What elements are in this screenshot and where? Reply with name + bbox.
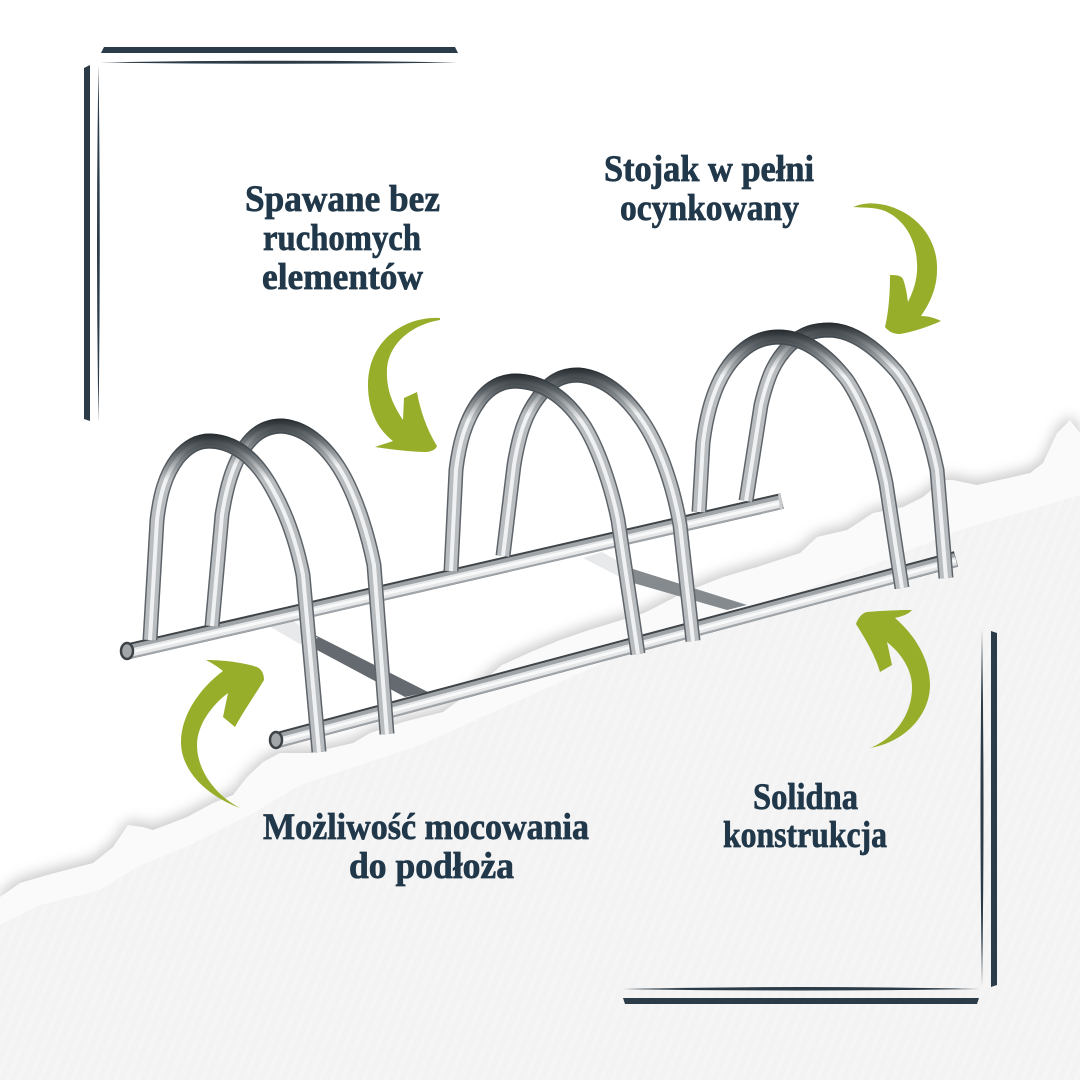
label: solid construction: Solidna <box>753 777 858 818</box>
product: bike rack <box>121 330 956 752</box>
label: welded without moving parts <box>245 179 440 298</box>
label: solid construction: konstrukcja <box>723 815 887 856</box>
corner frame: top left <box>84 47 458 422</box>
label: welded without moving parts: elementów <box>262 257 423 298</box>
hoop: right front <box>699 337 902 588</box>
corner frame: bottom right <box>623 630 997 1004</box>
hoop: left rear <box>212 426 387 734</box>
arrow: galvanised label to rack <box>853 203 941 334</box>
arrow: welded label to rack <box>368 318 440 452</box>
crossbar: right <box>583 552 747 610</box>
label: ground mounting: Możliwość mocowania <box>263 807 589 848</box>
arrow: mounting label to rack <box>181 660 264 808</box>
hoop: right rear <box>746 330 946 578</box>
label: solid construction <box>723 777 887 856</box>
label: fully galvanised: ocynkowany <box>620 188 799 229</box>
label: welded without moving parts: ruchomych <box>263 218 421 259</box>
label: welded without moving parts: Spawane bez <box>245 179 440 220</box>
label: ground mounting <box>263 807 589 887</box>
torn paper background <box>0 416 1080 1080</box>
hoop: middle front <box>451 381 638 654</box>
crossbar: left <box>267 621 428 697</box>
label: fully galvanised: Stojak w pełni <box>604 149 814 190</box>
arrow: construction label to rack <box>856 610 930 748</box>
label: fully galvanised <box>604 149 814 229</box>
label: ground mounting: do podłoża <box>349 846 514 887</box>
hoop: middle rear <box>503 375 693 641</box>
back rail <box>121 493 782 659</box>
front rail <box>270 559 956 748</box>
hoop: left front <box>150 441 319 752</box>
